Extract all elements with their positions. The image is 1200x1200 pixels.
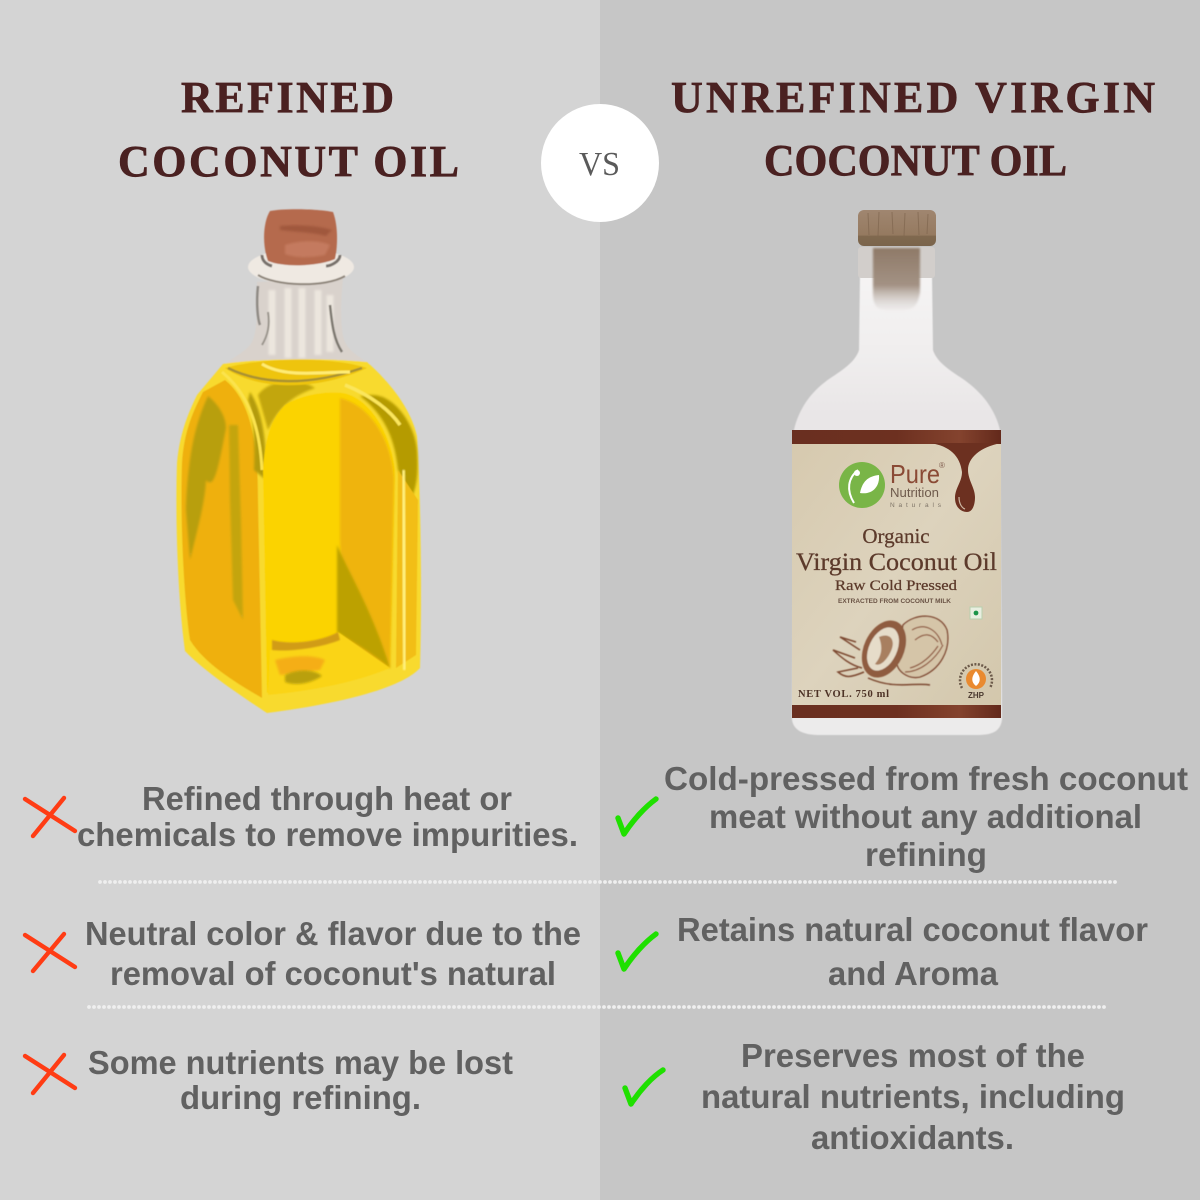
heading: refined coconut oil: REFINED — [181, 73, 394, 122]
illustration: virgin coconut oil bottle — [792, 210, 1002, 735]
comparison row 3 right: natural nutrients, including — [701, 1078, 1125, 1115]
comparison row 3 left — [25, 1044, 513, 1116]
comparison row 2 right — [618, 911, 1148, 992]
label — [792, 430, 1001, 718]
veg mark — [970, 607, 982, 619]
brand logo: Pure — [890, 459, 940, 489]
comparison row 2 left — [25, 915, 581, 992]
icon: red cross — [25, 1055, 75, 1093]
comparison row 1 right — [618, 760, 1188, 873]
icon: green check — [618, 799, 656, 834]
cork — [264, 209, 337, 265]
oil surface — [225, 360, 367, 385]
product name: Virgin Coconut Oil — [796, 549, 997, 576]
right facet — [360, 395, 418, 500]
comparison row 2 right: Retains natural coconut flavor — [677, 911, 1148, 948]
heading: refined coconut oil: COCONUT OIL — [118, 137, 459, 186]
vs badge: VS — [579, 146, 620, 183]
comparison row 3 left: during refining. — [180, 1079, 421, 1116]
product name: Organic — [862, 524, 930, 548]
cork plug in neck — [873, 248, 920, 310]
heading: unrefined virgin coconut oil — [671, 73, 1155, 185]
comparison row 2 right: and Aroma — [828, 955, 999, 992]
comparison row 3 right: Preserves most of the — [741, 1037, 1085, 1074]
left facet — [181, 380, 262, 698]
brand logo — [839, 459, 945, 509]
product name: EXTRACTED FROM COCONUT MILK — [838, 598, 951, 605]
heading: unrefined virgin coconut oil: UNREFINED VIRGIN — [671, 73, 1155, 122]
brand logo: Naturals — [890, 502, 942, 509]
zhp badge — [960, 664, 992, 700]
glass neck collar — [858, 247, 935, 278]
comparison row 1 right: Cold-pressed from fresh coconut — [664, 760, 1188, 797]
product name: Raw Cold Pressed — [835, 578, 958, 594]
comparison row 1 left: chemicals to remove impurities. — [77, 816, 578, 853]
zhp badge: ZHP — [968, 691, 985, 700]
label top band — [792, 430, 1001, 444]
comparison row 3 right — [625, 1037, 1125, 1156]
product name — [796, 524, 997, 605]
heading: refined coconut oil — [118, 73, 459, 186]
brand logo: ® — [939, 461, 945, 470]
heading: unrefined virgin coconut oil: COCONUT OIL — [764, 136, 1067, 185]
base of oil — [268, 632, 390, 695]
front facet — [263, 392, 395, 693]
icon: green check — [625, 1070, 663, 1104]
background: right panel — [600, 0, 1200, 1200]
net volume: NET VOL. 750 ml — [798, 689, 889, 700]
leaves — [833, 637, 930, 685]
collar — [248, 249, 354, 285]
neck — [222, 278, 370, 366]
whole coconut — [897, 616, 948, 678]
body outline — [176, 359, 421, 713]
comparison row 2 left: Neutral color & flavor due to the — [85, 915, 581, 952]
comparison row 1 right: meat without any additional — [709, 798, 1142, 835]
icon: red cross — [25, 934, 75, 971]
icon: green check — [618, 934, 656, 969]
icon: red cross — [25, 798, 75, 836]
brand logo: Nutrition — [890, 485, 939, 500]
comparison row 2 left: removal of coconut's natural — [110, 955, 556, 992]
comparison row 3 right: antioxidants. — [811, 1119, 1014, 1156]
oil drip — [930, 443, 1001, 512]
illustration: refined oil bottle — [176, 209, 421, 713]
label bottom band — [792, 705, 1001, 718]
comparison row 1 left: Refined through heat or — [142, 780, 512, 817]
half coconut — [853, 613, 915, 685]
comparison row 3 left: Some nutrients may be lost — [88, 1044, 513, 1081]
coconut sketch — [833, 613, 948, 685]
wooden cap — [858, 210, 936, 246]
vs badge — [541, 104, 659, 222]
bottle body — [792, 275, 1002, 735]
background: left panel — [0, 0, 600, 1200]
comparison row 1 left — [25, 780, 578, 853]
comparison row 1 right: refining — [865, 836, 987, 873]
